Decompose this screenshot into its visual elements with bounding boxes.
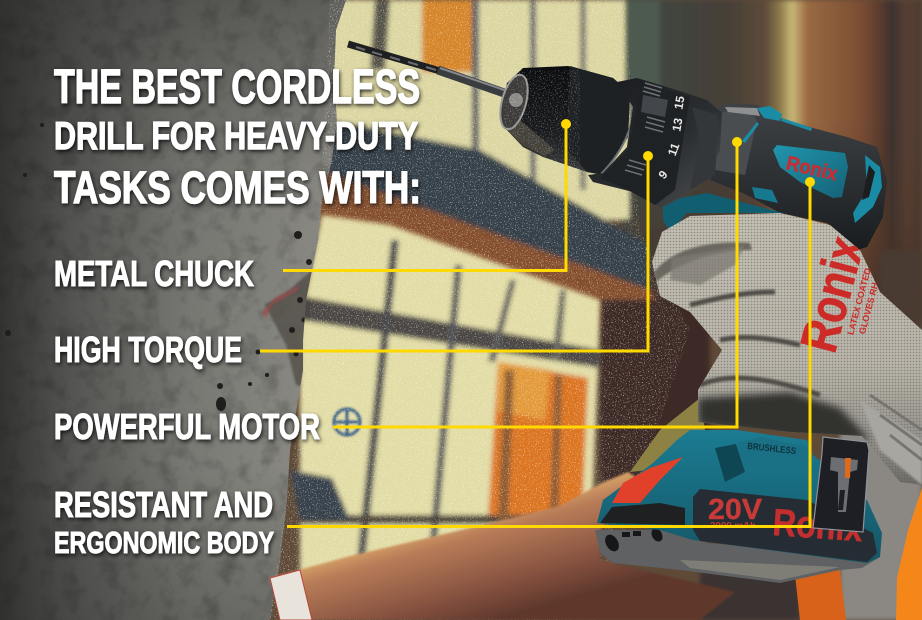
battery: brushless label: BRUSHLESS xyxy=(747,441,797,457)
belt clip xyxy=(813,437,869,532)
drill: motor housing xyxy=(710,103,887,250)
leader: metal chuck xyxy=(283,124,566,270)
teal accents xyxy=(757,106,782,121)
leader: high torque xyxy=(260,156,648,351)
drill body xyxy=(495,66,887,250)
label: metal chuck: METAL CHUCK xyxy=(54,253,254,294)
battery: brand label: Ronix xyxy=(771,502,864,550)
label: resistant and ergonomic body: ERGONOMIC BODY xyxy=(54,525,274,560)
label: high torque: HIGH TORQUE xyxy=(54,329,242,370)
dust specks xyxy=(270,0,700,620)
logo plate xyxy=(773,145,848,198)
torque numbers: 11 xyxy=(665,141,683,158)
torque numbers: 13 xyxy=(669,117,686,133)
title: THE BEST CORDLESS xyxy=(54,61,420,114)
glove logo: GLOVES RH-9 xyxy=(857,274,882,335)
torque numbers: 9 xyxy=(656,167,671,182)
battery: bottom housing xyxy=(595,530,880,583)
background: lower window panes xyxy=(290,215,600,575)
battery: label panel xyxy=(693,489,877,562)
background: upper window panes xyxy=(320,0,690,360)
glove cuff xyxy=(270,570,312,620)
drill bit xyxy=(348,44,516,97)
title: TASKS COMES WITH: xyxy=(54,162,421,213)
title: DRILL FOR HEAVY-DUTY xyxy=(54,115,418,158)
torque numbers xyxy=(656,95,688,182)
drill: handle top teal xyxy=(663,193,783,232)
battery: capacity label: 2000 mAh xyxy=(710,521,756,530)
leader: powerful motor xyxy=(333,142,737,427)
glove logo: Ronix xyxy=(790,231,876,358)
battery: red latch xyxy=(612,457,683,503)
broken concrete edge xyxy=(264,268,312,387)
glove logo: LATEX COATED xyxy=(845,267,873,336)
glove finger folds xyxy=(654,242,752,282)
chuck dust xyxy=(500,70,580,170)
gloved hand xyxy=(652,213,922,485)
torque numbers: 15 xyxy=(671,95,688,111)
drill: keyless chuck xyxy=(495,66,633,175)
logo text: Ronix xyxy=(784,152,840,186)
background: upper right rusted wall xyxy=(620,0,922,320)
label: resistant and ergonomic body xyxy=(54,484,274,560)
battery: 20V label: 20V xyxy=(708,494,763,526)
title xyxy=(54,61,421,213)
background: lower right dark area and shirt xyxy=(600,250,922,620)
battery: black strip xyxy=(600,503,685,525)
olive sleeve xyxy=(630,398,705,472)
leader: resistant body xyxy=(287,182,810,526)
battery pack xyxy=(595,430,882,583)
callout dots xyxy=(561,119,815,187)
label: resistant and ergonomic body: RESISTANT AND xyxy=(54,484,273,525)
orange safety vest xyxy=(795,488,922,620)
callout leader lines xyxy=(260,124,810,526)
label: powerful motor: POWERFUL MOTOR xyxy=(54,406,320,447)
battery: teal case xyxy=(597,430,882,563)
forearm xyxy=(270,398,735,620)
concrete wall xyxy=(0,0,350,620)
glove logo xyxy=(800,236,878,353)
drill: torque collar xyxy=(588,78,722,207)
feature labels xyxy=(54,253,320,560)
background: blue valve wheel xyxy=(334,409,360,435)
